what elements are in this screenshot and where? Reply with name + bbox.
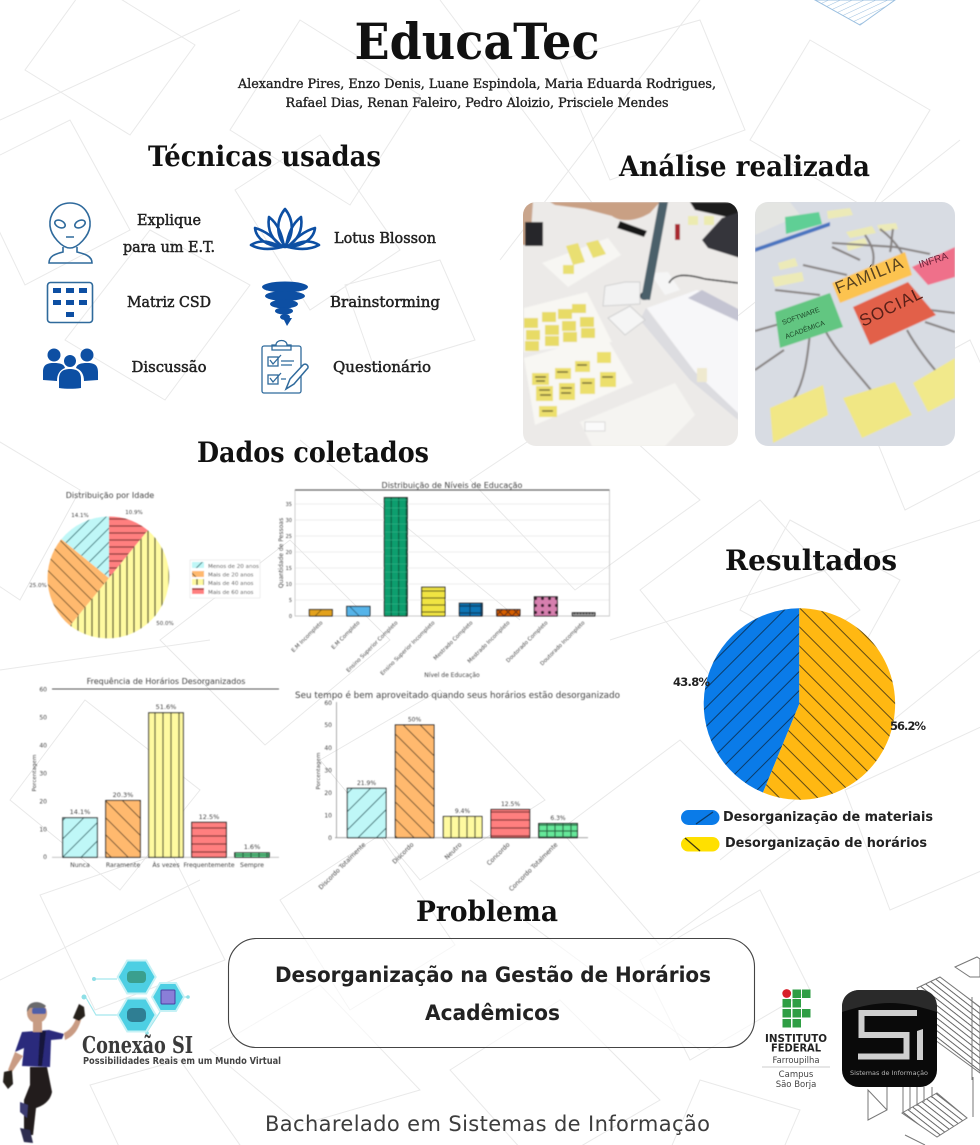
logo: conexão SI: Conexão SI <box>82 1032 193 1059</box>
chart: distribuição de níveis de educação: Ensino Superior Incompleto <box>380 620 436 677</box>
icon: alien <box>49 203 92 263</box>
chart: frequência de horários desorganizados: 14.1% <box>70 808 90 816</box>
chart: distribuição de níveis de educação: E.M Completo <box>331 620 361 651</box>
authors: Rafael Dias, Renan Faleiro, Pedro Aloizio, Prisciele Mendes <box>286 96 668 111</box>
chart: frequência de horários desorganizados: Nunca <box>70 862 90 869</box>
chart: frequência de horários desorganizados: 51.6% <box>156 703 176 711</box>
chart: seu tempo é bem aproveitado: 50% <box>408 716 421 724</box>
photo: mind map: SOCIAL <box>856 284 926 331</box>
photo: mind map: SOFTWARE <box>781 307 821 327</box>
decoration: bottom right isometric lines <box>868 957 980 1145</box>
chart: distribuição de níveis de educação: Distribuição de Níveis de Educação <box>382 481 523 490</box>
label: brainstorming: Brainstorming <box>330 293 440 311</box>
chart: distribuição de níveis de educação: Doutorado Incompleto <box>539 620 586 667</box>
footer: Bacharelado em Sistemas de Informação <box>265 1112 710 1136</box>
legend: resultados: Desorganização de horários <box>725 835 927 851</box>
panel: análise realizada <box>515 150 958 450</box>
label: discussão: Discussão <box>132 358 206 376</box>
chart: frequência de horários desorganizados: Frequência de Horários Desorganizados <box>87 676 245 686</box>
chart: seu tempo é bem aproveitado: 30 <box>324 768 332 774</box>
icon: hexagons <box>82 960 190 1035</box>
chart: frequência de horários desorganizados: 20.3% <box>113 791 133 799</box>
chart: seu tempo é bem aproveitado: Discordo Totalmente <box>318 841 368 891</box>
heading: análise realizada: Análise realizada <box>618 150 870 183</box>
chart: distribuição de níveis de educação: 5 <box>289 598 292 604</box>
logo: sistemas de informação: Sistemas de Informação <box>850 1069 928 1077</box>
chart: seu tempo é bem aproveitado: 6.3% <box>550 815 566 822</box>
legend: Menos de 20 anos <box>208 564 259 570</box>
chart: distribuição por idade: 50.0% <box>156 621 174 627</box>
chart: frequência de horários desorganizados: 40 <box>39 742 47 750</box>
chart: seu tempo é bem aproveitado: 12.5% <box>501 801 520 808</box>
pie chart: resultados: 56.2% <box>890 719 926 733</box>
chart: distribuição de níveis de educação: 30 <box>286 518 292 524</box>
chart: seu tempo é bem aproveitado: 0 <box>328 835 332 842</box>
logo: instituto federal: Campus <box>779 1070 814 1080</box>
chart: seu tempo é bem aproveitado: 50 <box>324 722 332 729</box>
icon: clipboard <box>262 340 308 393</box>
legend: resultados: Desorganização de materiais <box>723 809 933 825</box>
chart: distribuição de níveis de educação: E.M Incompleto <box>291 620 324 654</box>
chart: frequência de horários desorganizados: 10 <box>39 826 47 834</box>
heading: problema: Problema <box>416 895 558 928</box>
icon: people <box>43 348 98 389</box>
heading: resultados: Resultados <box>725 544 897 577</box>
logo: instituto federal: Farroupilha <box>772 1056 820 1066</box>
chart: seu tempo é bem aproveitado: Concordo <box>486 841 512 867</box>
chart: frequência de horários desorganizados: 12.5% <box>199 813 219 821</box>
chart: frequência de horários desorganizados <box>32 676 279 869</box>
pie chart: resultados <box>673 608 926 800</box>
photo: mind map <box>752 200 958 450</box>
icon: tornado <box>262 282 308 326</box>
chart: distribuição de níveis de educação: Mestrado Completo <box>433 620 474 662</box>
label: matriz CSD: Matriz CSD <box>127 293 211 311</box>
logo: instituto federal <box>762 989 830 1090</box>
chart: distribuição por idade: Distribuição por Idade <box>66 491 154 500</box>
chart: frequência de horários desorganizados: Sempre <box>240 862 264 869</box>
panel: resultados <box>673 544 933 852</box>
chart: distribuição por idade: 10.9% <box>125 510 143 516</box>
chart: distribuição de níveis de educação: 0 <box>289 614 292 620</box>
chart: distribuição por idade: 25.0% <box>29 583 47 589</box>
chart: frequência de horários desorganizados: Frequentemente <box>183 862 235 869</box>
chart: distribuição de níveis de educação: Ensino Superior Completo <box>346 620 399 674</box>
chart: frequência de horários desorganizados: 0 <box>43 854 47 861</box>
chart: frequência de horários desorganizados: 20 <box>39 798 47 806</box>
chart: distribuição de níveis de educação: 25 <box>286 534 292 540</box>
icon: matrix <box>48 282 92 322</box>
callout: problem statement <box>228 938 754 1048</box>
decoration: top right blue lines <box>815 0 895 25</box>
chart: seu tempo é bem aproveitado: Porcentagem <box>316 753 322 789</box>
chart: frequência de horários desorganizados: 60 <box>39 686 47 694</box>
chart: seu tempo é bem aproveitado: 10 <box>324 812 332 820</box>
chart: seu tempo é bem aproveitado: Seu tempo é bem aproveitado quando seus horários estão desorganizado <box>295 690 620 701</box>
chart: seu tempo é bem aproveitado: Neutro <box>444 841 464 861</box>
logo: conexão SI: Possibilidades Reais em um Mundo Virtual <box>83 1056 281 1067</box>
heading: dados coletados: Dados coletados <box>197 436 429 469</box>
legend: Mais de 20 anos <box>208 572 254 578</box>
chart: seu tempo é bem aproveitado: 21.9% <box>357 780 376 787</box>
authors <box>237 77 716 111</box>
label: lotus blossom: Lotus Blosson <box>334 229 436 247</box>
photo: mind map: ACADÊMICA <box>784 318 826 341</box>
authors: Alexandre Pires, Enzo Denis, Luane Espindola, Maria Eduarda Rodrigues, <box>237 77 716 92</box>
pie chart: resultados: 43.8% <box>673 675 710 689</box>
label: questionário: Questionário <box>333 358 431 376</box>
chart: seu tempo é bem aproveitado: 9.4% <box>455 808 470 815</box>
title: EducaTec <box>354 12 600 71</box>
chart: seu tempo é bem aproveitado: Concordo Totalmente <box>508 841 560 893</box>
chart: distribuição de níveis de educação: Quantidade de Pessoas <box>278 518 285 588</box>
chart: distribuição de níveis de educação: 15 <box>286 566 292 572</box>
logo: sistemas de informação <box>842 990 937 1087</box>
logo: instituto federal: São Borja <box>776 1080 816 1090</box>
chart: frequência de horários desorganizados: Às vezes <box>152 860 180 869</box>
chart: distribuição de níveis de educação: Doutorado Completo <box>505 620 549 664</box>
logo: instituto federal: INSTITUTO <box>765 1032 827 1045</box>
chart: distribuição por idade <box>29 491 260 638</box>
chart: seu tempo é bem aproveitado <box>295 690 620 893</box>
chart: seu tempo é bem aproveitado: 60 <box>324 700 332 707</box>
legend: resultados <box>681 809 933 852</box>
chart: distribuição de níveis de educação: Nível de Educação <box>424 672 480 679</box>
legend: Mais de 40 anos <box>208 581 254 587</box>
chart: distribuição de níveis de educação: 20 <box>286 550 292 556</box>
photo: mind map: INFRA <box>918 251 950 271</box>
chart: frequência de horários desorganizados: 50 <box>39 714 47 722</box>
chart: seu tempo é bem aproveitado: 40 <box>324 745 332 752</box>
panel: problema <box>228 895 754 1048</box>
chart: frequência de horários desorganizados: 1.6% <box>244 843 260 851</box>
photo: mind map: FAMÍLIA <box>832 253 906 298</box>
chart: distribuição de níveis de educação <box>278 481 610 679</box>
logo: conexão SI <box>3 960 281 1143</box>
chart: seu tempo é bem aproveitado: Discordo <box>391 841 416 866</box>
label: explique para um E.T. <box>123 211 215 256</box>
legend <box>190 560 260 598</box>
chart: frequência de horários desorganizados: Porcentagem <box>32 755 38 791</box>
chart: distribuição de níveis de educação: Mestrado Incompleto <box>467 620 511 665</box>
callout: problem statement: Desorganização na Gestão de Horários <box>275 963 711 987</box>
heading: técnicas usadas: Técnicas usadas <box>148 140 381 173</box>
label: explique para um E.T.: para um E.T. <box>123 238 215 256</box>
logo: instituto federal: FEDERAL <box>771 1042 821 1054</box>
chart: frequência de horários desorganizados: 30 <box>39 770 47 778</box>
chart: seu tempo é bem aproveitado: 20 <box>324 790 332 797</box>
chart: distribuição de níveis de educação: 10 <box>286 582 292 588</box>
chart: frequência de horários desorganizados: Raramente <box>106 862 140 869</box>
label: explique para um E.T.: Explique <box>137 211 201 229</box>
callout: problem statement: Acadêmicos <box>425 1001 560 1025</box>
chart: distribuição por idade: 14.1% <box>71 513 89 519</box>
chart: distribuição de níveis de educação: 35 <box>286 502 292 508</box>
icon: lotus <box>251 209 319 249</box>
panel: técnicas usadas <box>43 140 440 393</box>
photo: sticky notes on table <box>515 200 740 450</box>
legend: Mais de 60 anos <box>208 590 254 596</box>
illustration: person pointing <box>3 1002 85 1143</box>
